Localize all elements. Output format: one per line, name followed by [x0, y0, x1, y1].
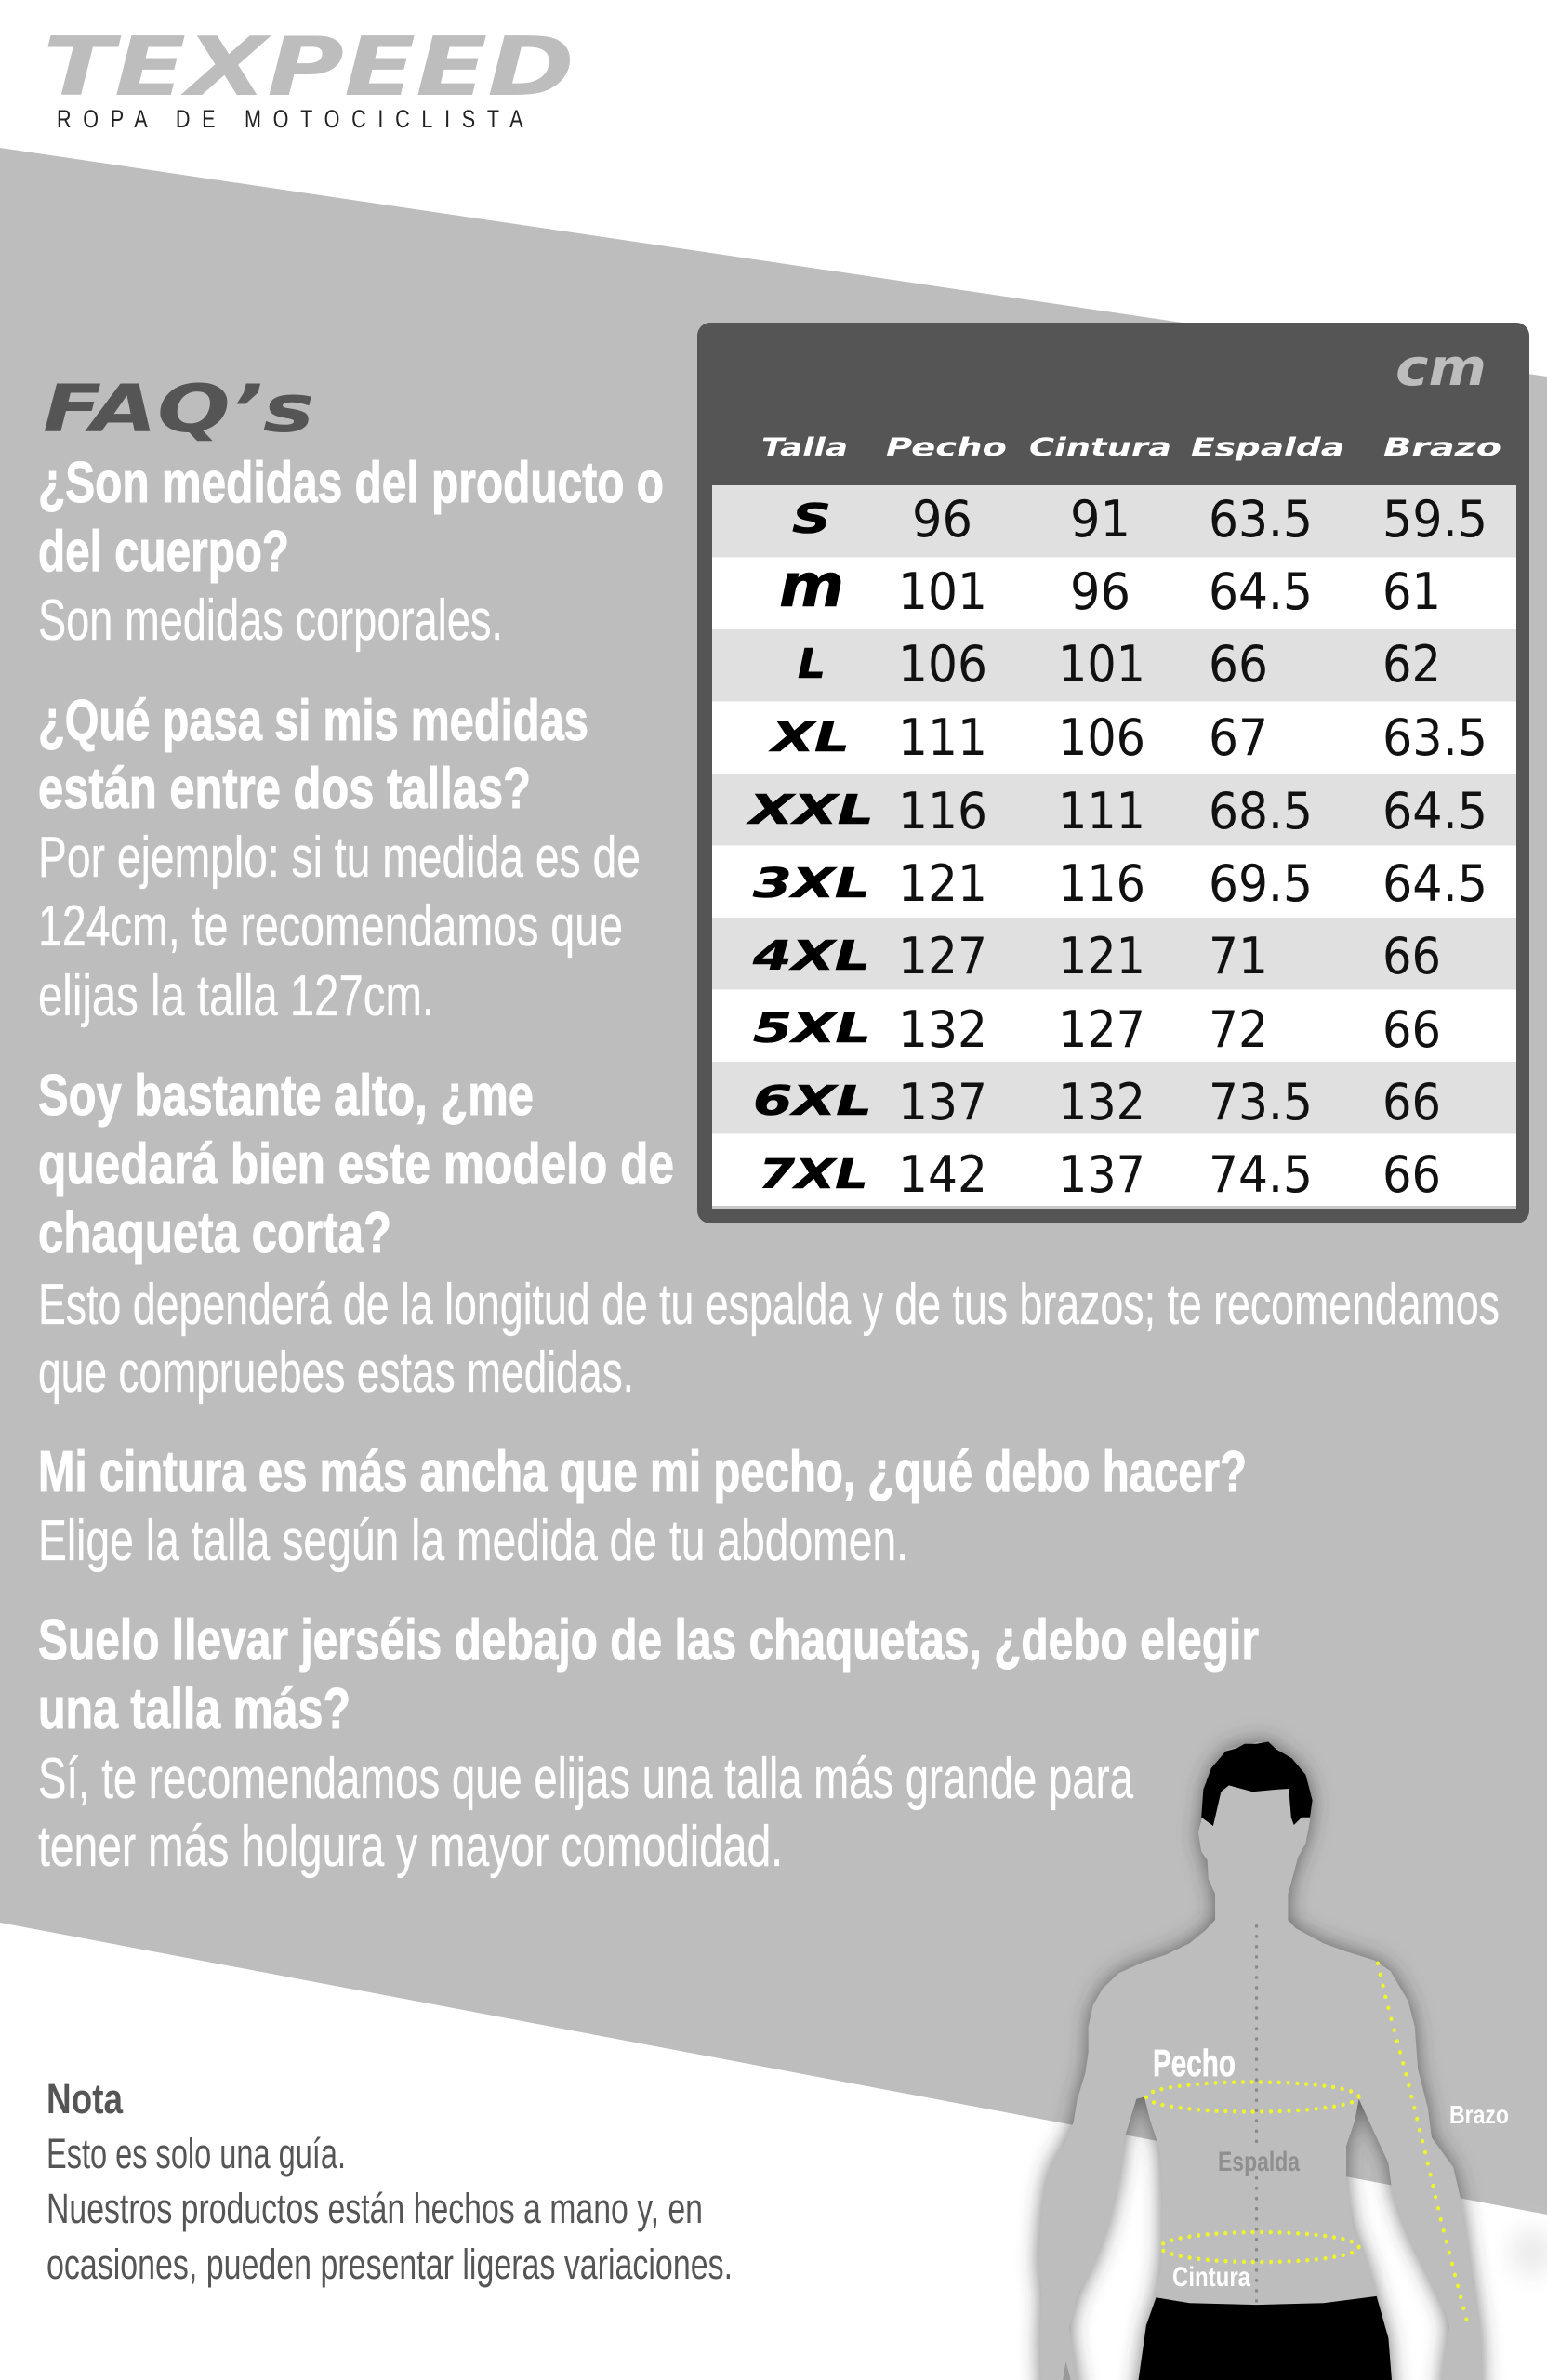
row 6XL: 66	[1382, 1073, 1441, 1131]
panel: size chart	[697, 323, 1529, 1223]
figure silhouette	[1038, 1742, 1483, 2380]
row 3XL: 69.5	[1209, 854, 1313, 913]
chart header row: Talla	[761, 433, 848, 462]
row 5XL: 132	[898, 1000, 987, 1059]
note block	[46, 2075, 733, 2288]
unit label: cm: cm	[1395, 338, 1487, 397]
row XXL: XXL	[746, 787, 874, 834]
FAQ 2: between two sizes	[38, 689, 641, 1028]
logo tagline: ROPA DE MOTOCICLISTA	[57, 106, 523, 134]
question 2: ¿Qué pasa si mis medidas	[38, 689, 588, 753]
row XXL: 64.5	[1382, 782, 1488, 840]
row 4XL: 127	[898, 927, 987, 985]
question 5	[38, 1608, 1259, 1741]
row 7XL: 142	[898, 1145, 987, 1204]
row M: m	[779, 552, 844, 621]
row 7XL: 66	[1382, 1145, 1441, 1204]
logo wordmark: TEXPEED	[43, 20, 575, 114]
answer 3: que compruebes estas medidas.	[38, 1341, 634, 1405]
question 3: quedará bien este modelo de	[38, 1132, 674, 1197]
row S: 63.5	[1209, 490, 1313, 549]
question 5: una talla más?	[38, 1677, 350, 1741]
chest measurement ring	[1146, 2082, 1359, 2112]
row S: S	[792, 496, 831, 543]
row 6XL: 137	[898, 1073, 987, 1131]
answer 1: Son medidas corporales.	[38, 588, 503, 653]
row L: 101	[1058, 635, 1145, 694]
row 3XL: 3XL	[753, 860, 870, 907]
FAQ 4: waist wider than chest	[38, 1440, 1247, 1573]
question 3	[38, 1064, 674, 1265]
FAQ 5: sweaters under jackets	[38, 1608, 1259, 1879]
answer 5	[38, 1747, 1133, 1879]
question 2: están entre dos tallas?	[38, 757, 531, 821]
row 6XL: 132	[1058, 1073, 1145, 1131]
row 4XL: 66	[1382, 927, 1441, 985]
row 5XL: 5XL	[753, 1005, 871, 1052]
answer 2: 124cm, te recomendamos que	[38, 894, 623, 959]
question 1: del cuerpo?	[38, 520, 289, 584]
back measurement line	[1253, 1926, 1261, 2304]
row L: 62	[1382, 635, 1441, 694]
row 7XL: 7XL	[759, 1151, 868, 1198]
answer 5: tener más holgura y mayor comodidad.	[38, 1815, 783, 1879]
waist measurement ring	[1160, 2232, 1359, 2262]
row 4XL: 71	[1209, 927, 1268, 985]
row 3XL: 64.5	[1382, 854, 1488, 913]
row 5XL: 127	[1058, 1000, 1145, 1059]
hair	[1201, 1742, 1313, 1826]
answer 4: Elige la talla según la medida de tu abdomen.	[38, 1509, 908, 1573]
row L: 66	[1209, 635, 1268, 694]
label: Brazo: Brazo	[1449, 2100, 1509, 2129]
row M	[712, 552, 1516, 629]
answer 2	[38, 826, 641, 1028]
chart header row: Cintura	[1029, 433, 1171, 462]
answer 3	[38, 1273, 1500, 1405]
row S: 96	[912, 490, 972, 549]
row XXL: 116	[898, 782, 987, 840]
chart header row: Pecho	[886, 433, 1007, 462]
row 4XL: 4XL	[752, 932, 870, 980]
row 4XL	[712, 918, 1516, 989]
question 3: chaqueta corta?	[38, 1201, 391, 1265]
row 4XL: 121	[1058, 927, 1145, 985]
note text	[46, 2130, 733, 2288]
label: Cintura: Cintura	[1172, 2262, 1250, 2293]
chart header row: Espalda	[1191, 433, 1344, 462]
question 2	[38, 689, 588, 821]
heading: FAQ's: FAQ’s	[43, 371, 314, 447]
logo: Texpeed brand	[43, 20, 575, 134]
row M: 101	[898, 562, 987, 621]
row XXL: 68.5	[1209, 782, 1313, 840]
chart dark frame	[697, 323, 1529, 1223]
row M: 61	[1382, 562, 1441, 621]
label: Pecho: Pecho	[1153, 2042, 1236, 2084]
question 3: Soy bastante alto, ¿me	[38, 1064, 534, 1128]
row 5XL: 72	[1209, 1000, 1268, 1059]
note text: ocasiones, pueden presentar ligeras variaciones.	[46, 2241, 733, 2288]
row L: 106	[898, 635, 987, 694]
row S: 91	[1070, 490, 1130, 549]
chart header row: Brazo	[1383, 433, 1501, 462]
FAQ 3: tall rider and short jacket	[38, 1064, 1500, 1405]
answer 2: Por ejemplo: si tu medida es de	[38, 826, 641, 890]
shorts	[1130, 2296, 1396, 2380]
row XXL: 111	[1058, 782, 1145, 840]
row 3XL: 121	[898, 854, 987, 913]
body measurement figure	[1038, 1742, 1509, 2380]
row 7XL: 137	[1058, 1145, 1145, 1204]
row XL: 111	[898, 708, 987, 767]
row XL	[712, 701, 1516, 774]
arm measurement line	[1378, 1964, 1469, 2330]
row L: L	[798, 641, 826, 688]
row 5XL: 66	[1382, 1000, 1441, 1059]
row 6XL	[712, 1062, 1516, 1134]
row S	[712, 485, 1516, 558]
note heading: Nota	[46, 2075, 124, 2122]
row XL: 106	[1058, 708, 1145, 767]
row 6XL: 6XL	[753, 1078, 872, 1125]
row XL: XL	[768, 714, 850, 761]
row L	[712, 629, 1516, 701]
row 5XL	[712, 989, 1516, 1062]
answer 2: elijas la talla 127cm.	[38, 964, 434, 1028]
chart header row	[761, 433, 1501, 462]
row 7XL	[712, 1134, 1516, 1206]
row 3XL	[712, 846, 1516, 918]
FAQ 1: product or body measurements	[38, 451, 664, 653]
row 6XL: 73.5	[1209, 1073, 1313, 1131]
row M: 64.5	[1209, 562, 1313, 621]
note text: Esto es solo una guía.	[46, 2130, 346, 2177]
row 7XL: 74.5	[1209, 1145, 1313, 1204]
answer 5: Sí, te recomendamos que elijas una talla más grande para	[38, 1747, 1133, 1811]
row XXL	[712, 774, 1516, 846]
row M: 96	[1070, 562, 1130, 621]
question 1	[38, 451, 664, 584]
label: Espalda: Espalda	[1218, 2147, 1300, 2177]
row XL: 63.5	[1382, 708, 1488, 767]
row S: 59.5	[1382, 490, 1488, 549]
question 1: ¿Son medidas del producto o	[38, 451, 664, 515]
row XL: 67	[1209, 708, 1268, 767]
row 3XL: 116	[1058, 854, 1145, 913]
note text: Nuestros productos están hechos a mano y, en	[46, 2185, 703, 2232]
